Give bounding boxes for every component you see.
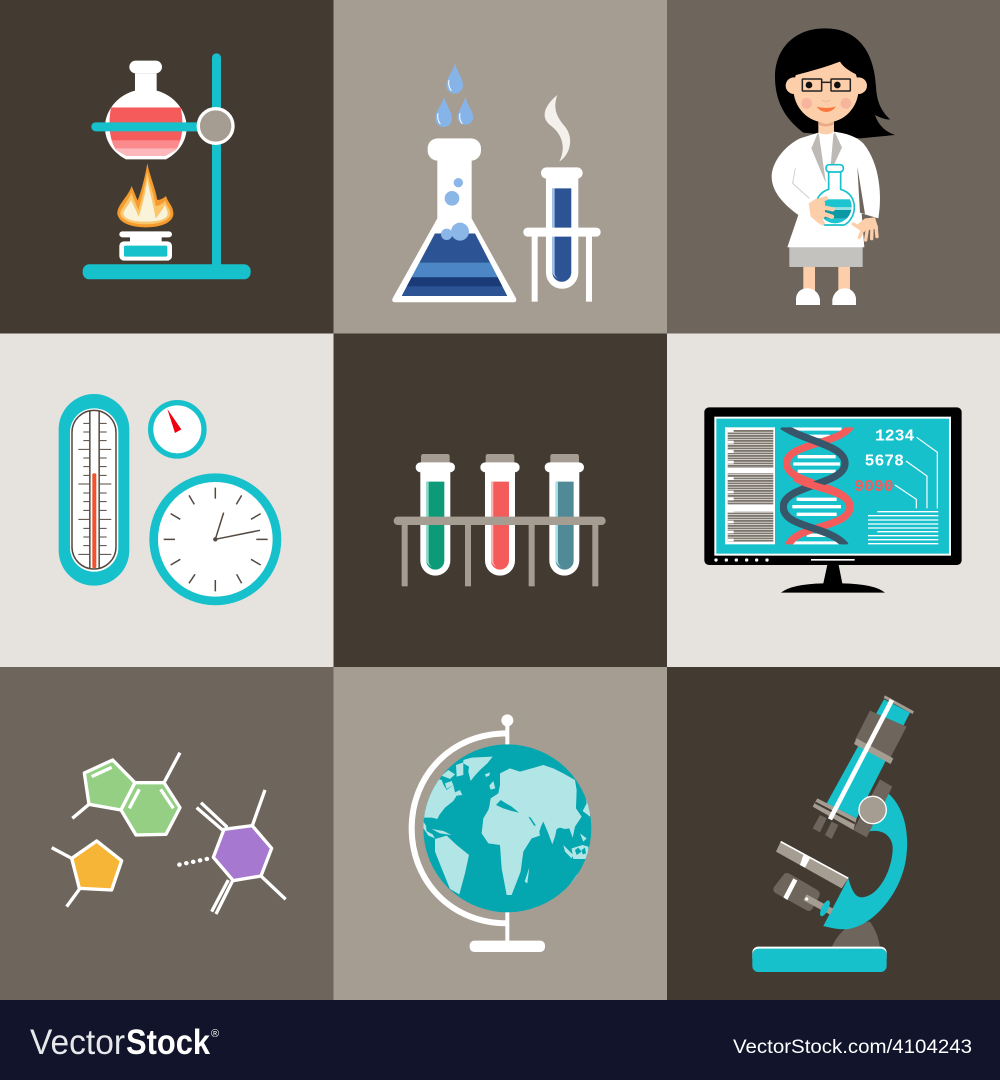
nose [822,99,830,102]
icon: microscope [752,695,914,972]
globe axis [505,725,509,945]
flask liquid stripes [402,234,508,296]
panel: globe background [334,667,667,1000]
monitor stand [781,563,885,593]
lapels [811,132,842,183]
lower flange [813,798,857,830]
Japan and Pacific coast [582,800,590,816]
bangs [785,37,867,78]
panel: molecules background [0,667,334,1000]
South America [435,836,469,894]
Australia [570,873,578,884]
icon: conical flask with drops and a test tube [392,63,601,302]
icon: computer monitor showing DNA [704,407,962,593]
Mediterranean and inland seas [496,800,586,855]
globe base [470,941,545,952]
red tube [480,454,520,576]
Arctic islands [442,762,490,789]
steam [545,95,570,162]
purple hexagon molecule [197,790,286,914]
conical flask [392,158,516,302]
Mexico and Central America [423,822,435,838]
panel: burner background [0,0,334,334]
clamp knob [198,109,233,143]
shoes [796,288,856,305]
bubbles [441,178,469,241]
monitor frame [704,407,962,565]
dotted bond [179,858,212,865]
burner [119,231,172,261]
DNA helix [782,426,851,546]
microscope base [752,947,887,972]
focus knob [859,796,886,824]
Cuba and Caribbean [432,829,452,835]
axis knob [501,714,513,726]
image ID: VectorStock.com/4104243 [733,1037,972,1058]
mouth [817,107,836,112]
right hand [853,217,878,240]
Madagascar [525,867,529,883]
eyepiece tube [827,699,910,818]
objective lenses [813,815,838,839]
logo word Stock: Stock [126,1023,210,1062]
pedestal [832,922,880,947]
thermometer [59,394,129,586]
stand pole [212,53,221,270]
stage [776,842,848,888]
footer bar [0,1000,1000,1080]
green tube [416,454,455,576]
glasses [802,79,850,91]
eyes [806,82,841,88]
coat arm crease [793,168,809,198]
tube sleeve [855,711,907,762]
flask lip [129,61,162,73]
skirt [789,245,863,267]
icon: scientist holding a flask [772,28,895,305]
cheeks [801,98,851,109]
flask lip [428,138,481,161]
clamp arm [91,122,205,131]
hair [775,28,895,138]
registered mark: ® [211,1028,219,1040]
wall clock [154,478,277,601]
Africa and Eurasia [482,765,582,895]
logo word Vector: Vector [30,1023,125,1062]
light housing [773,873,832,918]
test tube rack [523,228,601,302]
panel: scientist background [667,0,1000,334]
neck [818,117,834,137]
panel: monitor background [667,334,1000,667]
screen [715,418,950,555]
flask liquid layers [110,108,182,156]
Greenland [463,757,493,781]
panel: thermometer and clocks background [0,334,334,667]
globe ocean [423,744,591,912]
left hand [809,198,833,224]
text lines [868,512,938,544]
panel: microscope background [667,667,1000,1000]
globe stand arc [412,733,507,923]
North America [424,779,462,819]
round flask [105,73,187,159]
focus block [853,779,892,837]
tube highlight [830,700,892,819]
stand base [83,264,251,279]
small gauge [151,403,204,456]
drops [435,63,473,127]
flame [117,163,173,227]
icon: chemical molecules [52,753,286,914]
VectorStock logo [30,1023,219,1062]
panel: flask background [334,0,667,334]
rack [394,517,606,586]
connector lines [895,437,937,508]
lab coat [772,132,880,247]
Southeast Asia islands [563,833,588,859]
eyepiece cap [884,695,914,714]
tube band [854,738,893,764]
legs [803,265,850,292]
barcode data column [725,427,775,544]
icon: thermometer and clocks [59,394,277,601]
continents [413,757,597,895]
small flask [816,165,854,225]
face [786,54,867,123]
coat arm gap [857,167,865,214]
teal tube [545,454,584,576]
number 5678: 5678 [865,452,904,471]
bezel dots [714,558,855,562]
number 1234: 1234 [875,427,915,446]
icon: round flask on a stand over a burner [83,53,251,279]
green double-ring molecule [72,753,180,835]
icon: world globe [412,714,597,952]
yellow pentagon molecule [52,841,122,907]
test tube [541,167,583,289]
curved arm [823,793,907,929]
panel: test tubes background [334,334,667,667]
icon: test tubes in a rack [394,454,606,586]
number 9090: 9090 [854,477,894,496]
British Isles [489,781,495,790]
